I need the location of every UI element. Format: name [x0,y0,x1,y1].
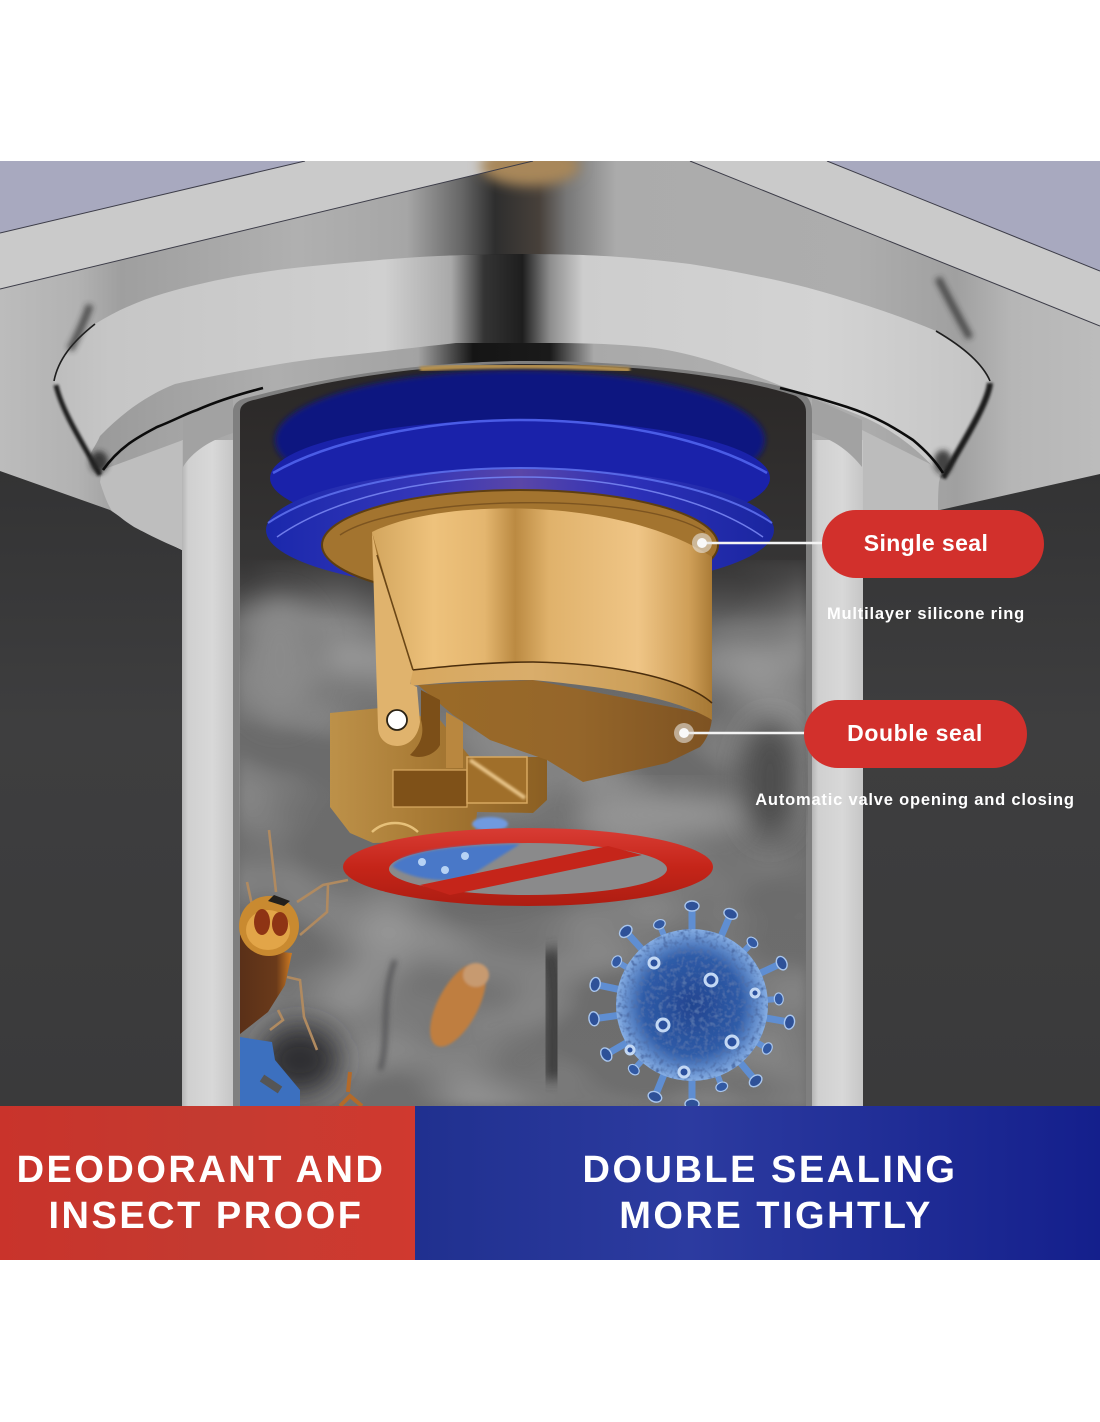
hinge base [330,708,547,843]
rim lines [340,503,705,535]
left dark panel [0,471,182,1106]
pill: single seal [822,510,1044,578]
blue banner: DOUBLE SEALING [583,1149,957,1191]
caption: multilayer silicone ring: Multilayer silicone ring [827,605,1025,623]
large virus [588,901,796,1109]
floor plate top strip [0,161,1100,480]
valve rim [321,489,719,586]
smoke wisps [244,600,800,1095]
blue glow under valve [472,817,508,831]
base pivot [372,823,418,832]
plate edge lines [0,161,1100,326]
blue banner [415,1106,1100,1260]
prohibition sign [343,828,713,906]
right dark panel [863,474,1100,1106]
cylinder lower band [410,662,712,720]
red banner [0,1106,415,1260]
swing arm [372,532,420,746]
product photo [0,146,1100,1260]
gold valve body [322,490,718,843]
blue banner: MORE TIGHTLY [619,1195,933,1237]
single seal connector [692,533,825,553]
lavender background corners [0,161,1100,270]
flange edge shadows [56,385,100,475]
pipe interior [233,361,812,1106]
red banner: DEODORANT AND [17,1149,385,1191]
small virus, bottom left [240,1037,362,1106]
lower body [418,680,712,782]
flange neck left [100,440,183,550]
flange neck right [862,430,940,510]
double seal connector [674,723,808,743]
large cockroach [239,830,348,1050]
caption: automatic valve: Automatic valve opening and closing [755,791,1075,809]
cylinder [372,508,712,705]
blue silicone ring [266,366,774,592]
round flange ring [54,254,990,478]
flange black contour lines [103,388,943,473]
hinge pin [387,710,407,730]
floor plate slanted recess [0,161,1100,520]
red banner: INSECT PROOF [48,1195,364,1237]
pill: double seal: Double seal [847,720,983,746]
drain pipe walls [182,396,863,1106]
pill: double seal [804,700,1027,768]
pill: single seal: Single seal [864,530,988,556]
warm reflection at top [480,146,580,186]
recessed squares [393,770,467,807]
small cockroach [428,962,490,1048]
